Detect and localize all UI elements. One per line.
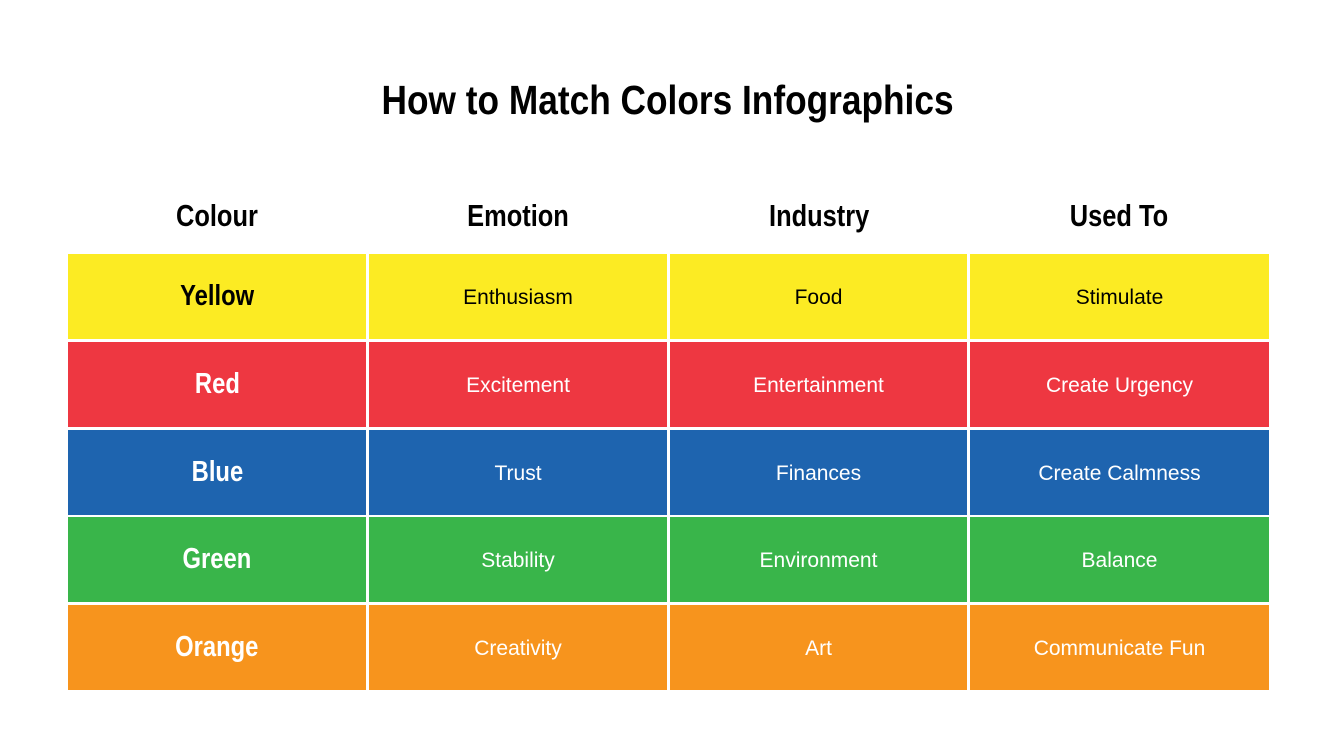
row: blue: Create Calmness [1038,462,1201,485]
row: green: Balance [1082,549,1157,572]
row: red [68,342,1269,427]
row: blue: Finances [776,462,861,485]
row: blue: Blue [191,456,243,488]
row: blue: Trust [494,462,542,485]
row: blue [68,430,1269,515]
row: yellow: Food [795,286,842,309]
header: Colour: Colour [176,198,258,233]
row: green: Environment [760,549,877,572]
row: yellow [68,254,1269,339]
row: orange [68,605,1269,690]
header: Emotion: Emotion [467,198,569,233]
row: orange: Creativity [474,637,562,660]
row: red: Excitement [466,374,570,397]
header: Industry: Industry [769,198,869,233]
row: yellow: Enthusiasm [463,286,573,309]
row: yellow: Stimulate [1076,286,1163,309]
row: yellow: Yellow [180,280,254,312]
row: green: Stability [481,549,555,572]
row: orange: Communicate Fun [1034,637,1205,660]
row: green [68,517,1269,602]
row: red: Entertainment [753,374,884,397]
header: Used To: Used To [1070,198,1168,233]
row: red: Red [195,368,239,400]
title: How to Match Colors Infographics [382,77,954,123]
row: red: Create Urgency [1046,374,1193,397]
row: orange: Orange [175,631,259,663]
row: orange: Art [805,637,832,660]
row: green: Green [183,543,251,575]
